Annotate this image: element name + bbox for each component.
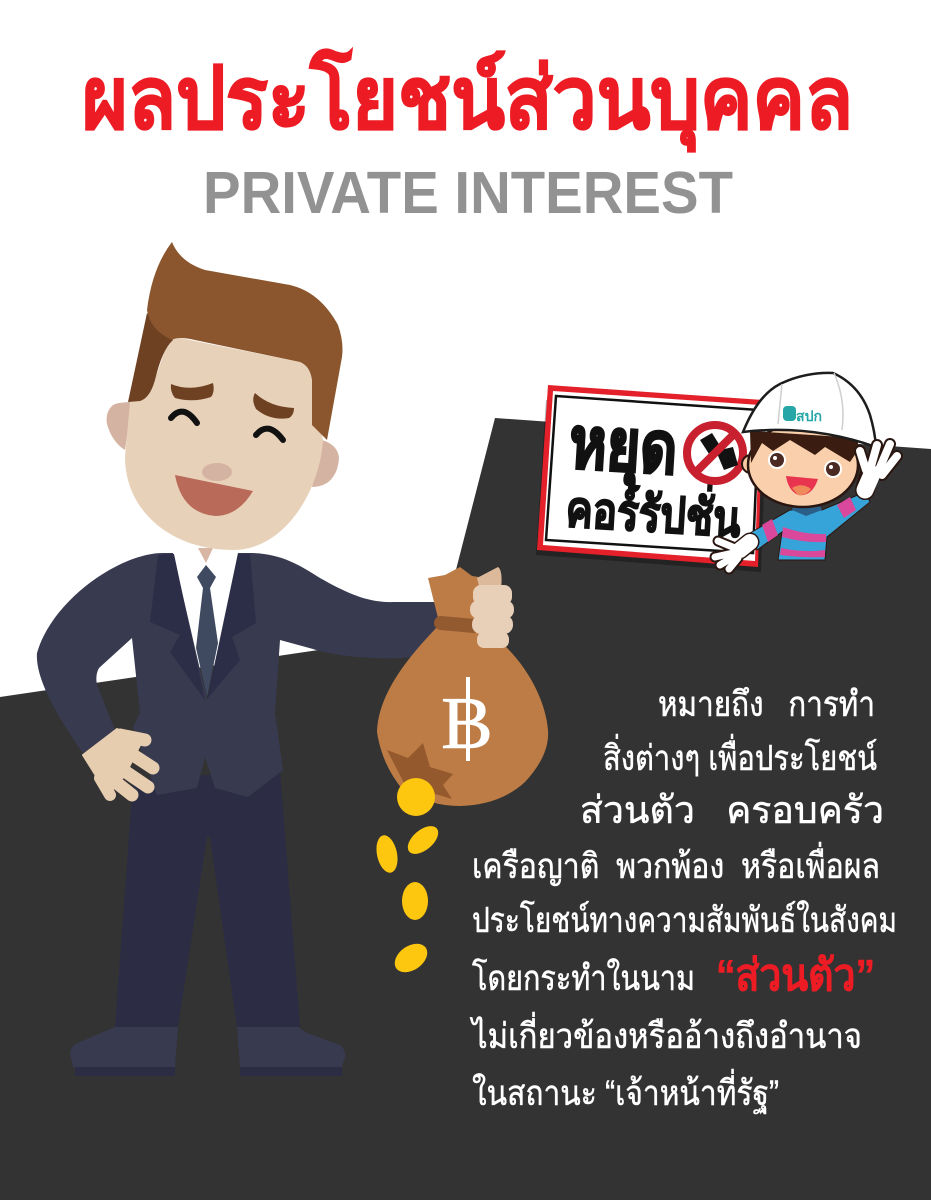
hand on hip — [83, 729, 153, 795]
line 2: สิ่งต่างๆ เพื่อประโยชน์ — [603, 734, 877, 778]
line 4: เครือญาติ พวกพ้อง หรือเพื่อผล — [472, 842, 880, 886]
mascot body — [750, 492, 870, 560]
neck — [198, 548, 213, 563]
hair — [128, 242, 342, 440]
mascot pointing glove — [715, 541, 750, 569]
definition text block — [469, 685, 897, 1114]
shirt — [173, 553, 238, 652]
smiling eyes — [171, 412, 283, 440]
mascot eyes — [768, 451, 842, 478]
title — [82, 48, 853, 226]
shoes — [70, 1027, 345, 1076]
mascot raised glove — [860, 444, 897, 490]
suit jacket — [37, 553, 440, 797]
bag tie — [441, 623, 474, 626]
falling coins — [373, 778, 443, 978]
face — [125, 338, 323, 550]
line 6: โดยกระทำในนาม — [472, 958, 695, 998]
mascot mouth — [786, 476, 818, 495]
necktie — [196, 565, 218, 697]
mouth — [175, 475, 253, 516]
sign board — [536, 385, 767, 572]
dark background shape — [0, 418, 931, 1200]
trousers — [115, 770, 300, 1027]
mascot collar — [792, 500, 822, 516]
fist — [470, 567, 514, 648]
line 3: ส่วนตัว ครอบครัว — [580, 790, 884, 832]
bag patch — [387, 743, 453, 799]
helmet logo: สปก — [796, 408, 822, 424]
red emphasis: “ส่วนตัว” — [716, 951, 875, 1000]
title: ผลประโยชน์ส่วนบุคคล — [82, 48, 853, 152]
line 7: ไม่เกี่ยวข้องหรืออ้างถึงอำนาจ — [469, 1012, 862, 1056]
businessman illustration — [37, 242, 440, 1076]
nose — [202, 463, 232, 481]
mascot head — [742, 423, 858, 507]
icon: no handshake — [687, 425, 743, 481]
bag body — [377, 624, 548, 806]
sign heading: stop: หยุด — [567, 403, 680, 495]
money bag — [377, 567, 548, 806]
lapels — [150, 554, 256, 700]
baht symbol: B — [441, 683, 493, 765]
mascot helmet — [743, 373, 876, 447]
subtitle: PRIVATE INTEREST — [203, 160, 733, 226]
mascot in helmet — [715, 373, 897, 569]
line 1: หมายถึง การทำ — [658, 685, 875, 724]
line 8: ในสถานะ “เจ้าหน้าที่รัฐ” — [472, 1069, 779, 1114]
right ear — [312, 440, 339, 487]
left ear — [107, 402, 132, 450]
stop corruption sign — [536, 385, 767, 572]
eyebrows — [171, 383, 294, 419]
bag neck — [428, 567, 500, 630]
sign heading: corruption: คอร์รัปชั่น — [564, 474, 743, 548]
